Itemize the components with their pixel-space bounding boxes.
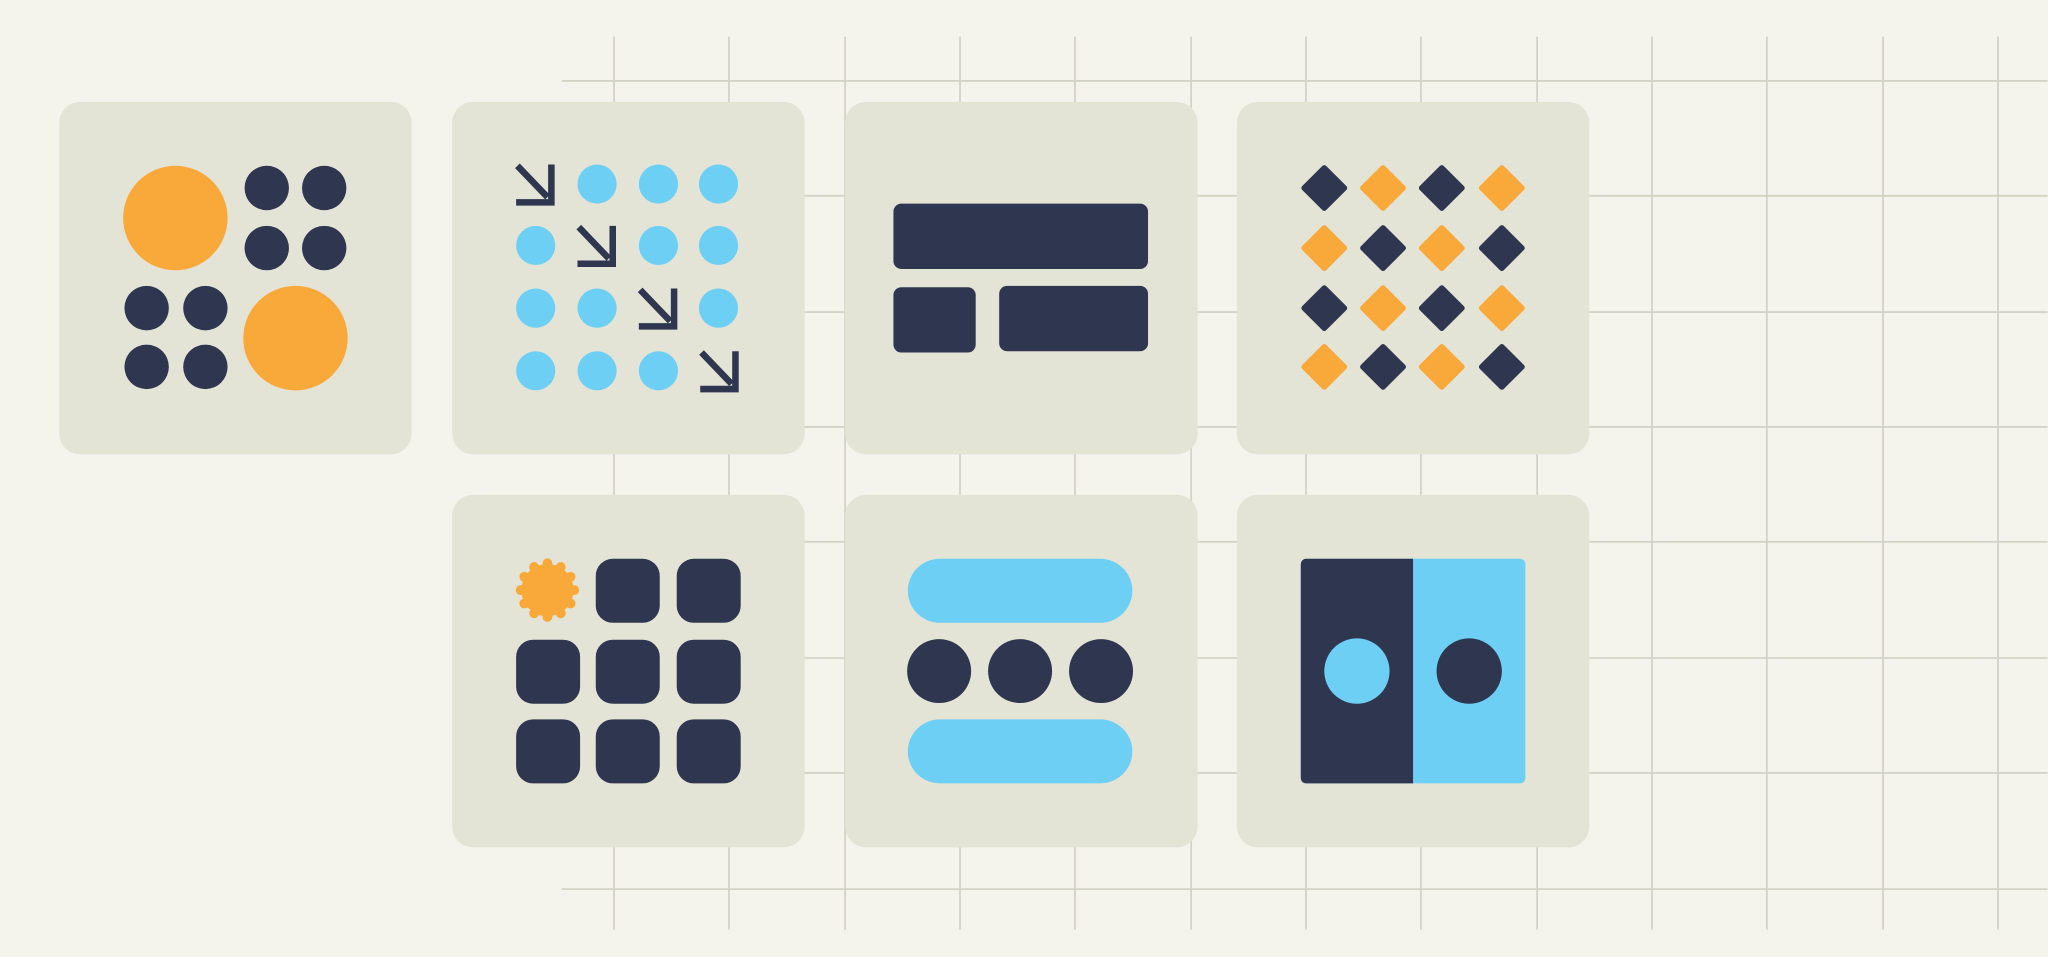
panel: figure ground [1237, 495, 1589, 847]
panel: proximity circles [59, 102, 412, 454]
panel: arrows diagonal [452, 102, 805, 454]
panel: rectangles [845, 102, 1198, 454]
panel: starburst among squares [452, 495, 805, 847]
panel: pills and circles [845, 495, 1198, 847]
panel: diamonds [1237, 102, 1589, 454]
